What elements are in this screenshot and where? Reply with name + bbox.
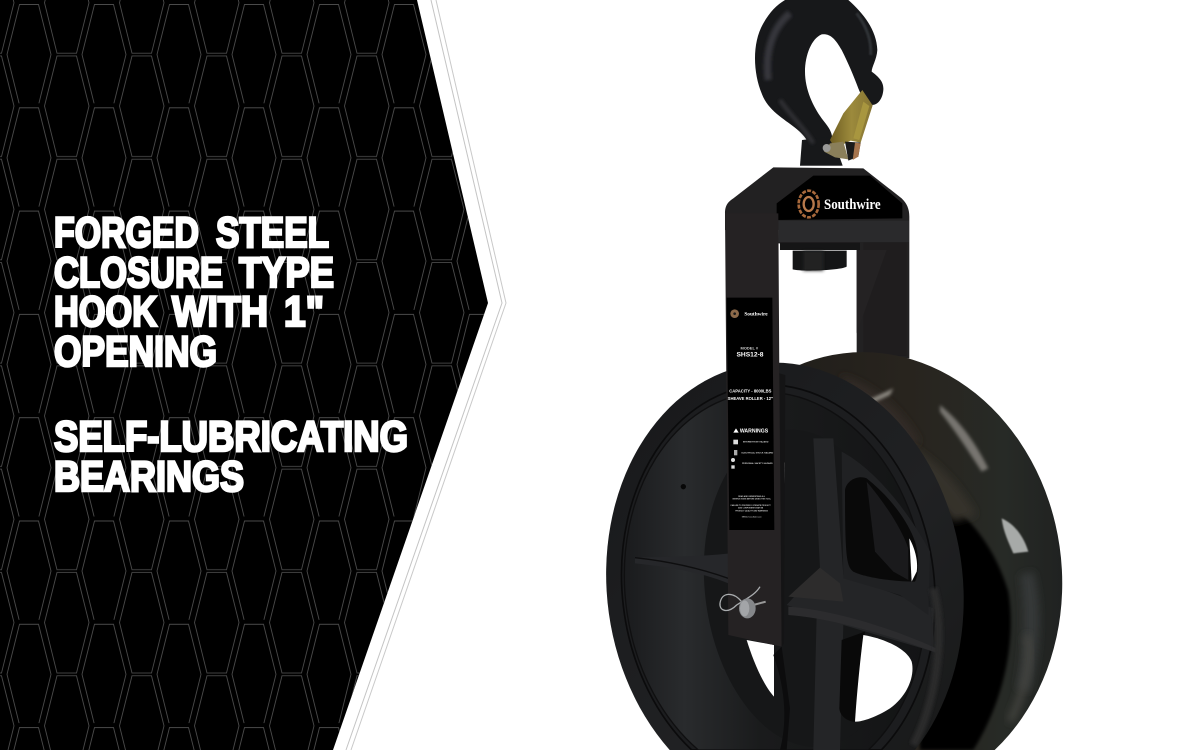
safety label: model and warnings: WARNINGS (740, 429, 768, 435)
heading: product features: SELF-LUBRICATING (54, 413, 408, 461)
heading: product features: FORGED (54, 209, 199, 257)
safety label: model and warnings (727, 298, 774, 530)
locking pin (720, 587, 766, 618)
heading: product features: 1" (284, 288, 324, 336)
top label: Southwire logo: Southwire (824, 197, 881, 213)
heading: product features: CLOSURE (54, 249, 223, 297)
safety label: model and warnings: READ AND UNDERSTAND ALL (738, 495, 766, 498)
safety label: model and warnings: INSTRUCTIONS BEFORE USING THIS TOOL (732, 499, 772, 501)
safety label: model and warnings: FAILURE TO PROPERLY OPERATE PRODUCT (731, 504, 772, 507)
product photo: sheave with hook (606, 0, 1062, 750)
hook (755, 0, 883, 166)
safety label: model and warnings: PERSONAL SAFETY HAZARD (742, 462, 773, 465)
safety label: model and warnings: SHS12-8 | southwire.com (742, 515, 762, 518)
left yoke leg (725, 213, 785, 647)
safety label: model and warnings: Southwire (744, 312, 768, 318)
safety label: model and warnings: SHS12-8 (736, 352, 764, 359)
safety label: model and warnings: SHEAVE ROLLER - 12" (728, 396, 773, 401)
heading: product features: TYPE (239, 249, 334, 297)
hook latch (823, 90, 873, 161)
top label: Southwire logo (777, 176, 902, 220)
safety label: model and warnings: AND COMPONENTS MAY BE (738, 507, 764, 510)
front wheel face (606, 363, 964, 750)
panel: black hexagon-pattern arrow (0, 0, 488, 750)
safety label: model and warnings: CAPACITY - 8000LBS (729, 389, 772, 394)
back wheel groove (800, 352, 1062, 750)
safety label: model and warnings: PRODUCT QUALITY AND WARNINGS (735, 510, 769, 513)
heading: product features: STEEL (216, 209, 329, 257)
safety label: model and warnings: ELECTRICAL SHOCK HAZARD (741, 452, 774, 455)
yoke bracket (725, 167, 909, 358)
arrow outline: double chevron line (346, 0, 506, 750)
heading: product features: BEARINGS (54, 453, 244, 501)
heading: product features: HOOK (54, 288, 157, 336)
heading: product features: OPENING (54, 328, 217, 376)
heading: product features: WITH (172, 288, 268, 336)
safety label: model and warnings: MODEL # (741, 345, 759, 350)
safety label: model and warnings: INTERMITTENT HAZARD (743, 441, 769, 444)
heading: product features (54, 209, 408, 501)
